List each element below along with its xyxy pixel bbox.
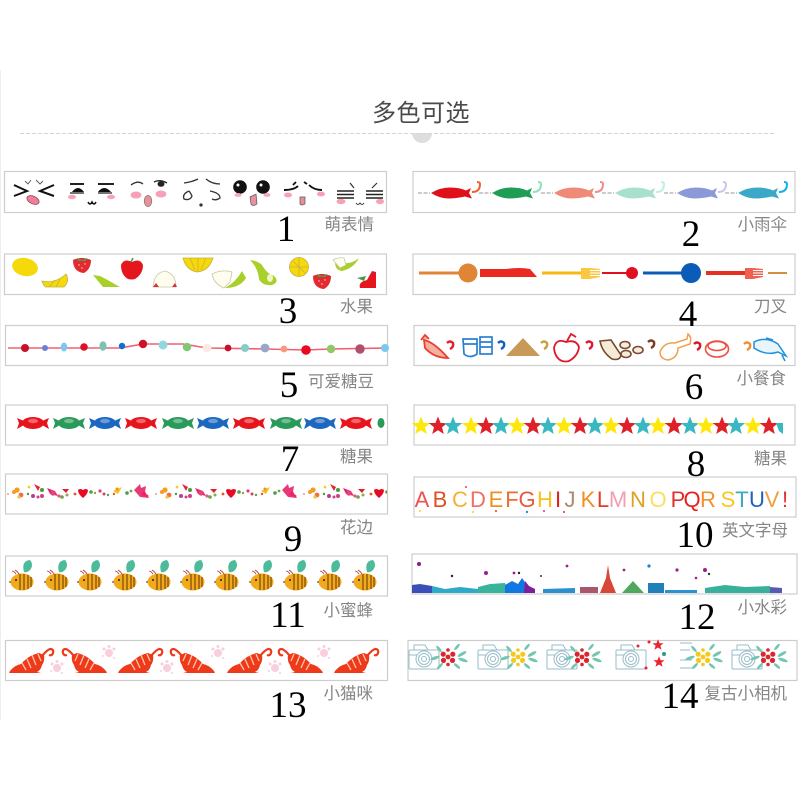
style name labels: 小雨伞 [738, 215, 788, 234]
small swirls [447, 340, 750, 350]
style name labels: 刀叉 [754, 298, 787, 316]
number labels: 9 [284, 519, 302, 560]
tape 10: alphabet: Q [683, 487, 701, 512]
tape 10: alphabet: B [433, 487, 447, 512]
tape 3: fruit [4, 254, 386, 294]
number labels: 7 [281, 439, 299, 480]
tape 5: candy beads [6, 326, 389, 366]
style name labels: 糖果 [340, 447, 373, 466]
tape 11: little bees [6, 556, 388, 596]
biscuit and beans [600, 340, 643, 360]
tape 10: alphabet: A [415, 487, 430, 512]
tape 10: alphabet: D [470, 487, 486, 512]
tape 7: candy [6, 405, 388, 445]
tape 10: alphabet: J [564, 487, 576, 512]
tape 12: watercolor skyline [412, 554, 797, 594]
number labels: 5 [280, 365, 298, 406]
wreath with red stars [636, 639, 666, 670]
number labels: 14 [662, 676, 698, 717]
tape 10: alphabet: H [537, 487, 553, 512]
tape 10: alphabet: F [505, 487, 519, 512]
carrot [421, 335, 448, 358]
tape 10: alphabet: T [735, 487, 749, 512]
tape 10: alphabet: ! [782, 487, 788, 512]
number labels: 4 [679, 294, 697, 335]
number labels: 10 [676, 515, 714, 556]
style name labels: 小蜜蜂 [324, 601, 374, 620]
paint splatter [417, 562, 710, 579]
lemons [10, 255, 309, 287]
tape 14: retro cameras [408, 639, 797, 680]
tape 6: small snacks [414, 326, 795, 366]
white fruit halves [153, 258, 346, 288]
apples and strawberries [73, 258, 376, 289]
tape 10: alphabet: O [649, 487, 667, 512]
style name labels: 小餐食 [736, 369, 786, 388]
cups [463, 337, 492, 356]
tape 10: alphabet: U [749, 487, 765, 512]
tape 10: alphabet: K [581, 487, 596, 512]
tape 8: stars [412, 405, 795, 445]
number labels: 2 [682, 214, 700, 255]
style name labels: 萌表情 [324, 215, 374, 234]
splatter dots [419, 486, 565, 513]
face 3 [130, 181, 167, 206]
tape 10: alphabet: R [700, 487, 716, 512]
style name labels: 英文字母 [722, 521, 788, 540]
number labels: 8 [687, 444, 705, 485]
tape 2: small umbrellas [413, 172, 795, 212]
style name labels: 水果 [340, 297, 373, 316]
tape 10: alphabet: L [597, 487, 609, 512]
left page edge [0, 70, 2, 720]
number labels [270, 209, 716, 726]
style name labels: 复古小相机 [704, 684, 788, 703]
chicken leg [660, 334, 691, 360]
eiffel tower [600, 565, 616, 593]
tape 10: alphabet: E [489, 487, 503, 512]
tape 13: little cats [6, 640, 388, 680]
steak [706, 341, 728, 357]
tape 9: floral border [6, 474, 445, 514]
face 6 [284, 182, 325, 205]
title: 多色可选 [372, 100, 470, 127]
number labels: 13 [270, 685, 306, 726]
style name labels: 可爱糖豆 [308, 372, 374, 391]
face 7 [336, 183, 384, 204]
face 1 [14, 180, 54, 206]
style name labels: 小水彩 [738, 598, 788, 617]
tape 10: alphabet [414, 477, 796, 517]
style name labels: 小猫咪 [324, 684, 374, 703]
number labels: 6 [685, 367, 703, 408]
tape 10: alphabet: I [555, 487, 561, 512]
number labels: 3 [279, 291, 297, 332]
heading divider with half circle [20, 133, 775, 143]
tape 10: alphabet: G [518, 487, 536, 512]
number labels: 11 [270, 595, 306, 636]
pears [93, 258, 359, 288]
tape 10: alphabet: N [630, 487, 646, 512]
number labels: 1 [277, 209, 295, 250]
face 2 [68, 184, 115, 204]
style name labels: 糖果 [754, 449, 787, 468]
green hill [622, 581, 644, 593]
tape 10: alphabet: S [721, 487, 735, 512]
tape 4: knives and forks [413, 254, 795, 294]
face 4 [184, 179, 220, 206]
apple [554, 334, 579, 362]
tape 10: alphabet: M [609, 487, 627, 512]
tape 10: alphabet: P [671, 487, 685, 512]
tape 10: alphabet: V [765, 487, 780, 512]
tape 10: alphabet: C [452, 487, 468, 512]
grain pile [506, 338, 540, 356]
tape 1: cute faces [4, 172, 386, 212]
face 5 [233, 180, 270, 206]
style name labels [308, 215, 788, 703]
fish [754, 338, 786, 361]
style name labels: 花边 [340, 518, 374, 537]
number labels: 12 [678, 597, 716, 638]
